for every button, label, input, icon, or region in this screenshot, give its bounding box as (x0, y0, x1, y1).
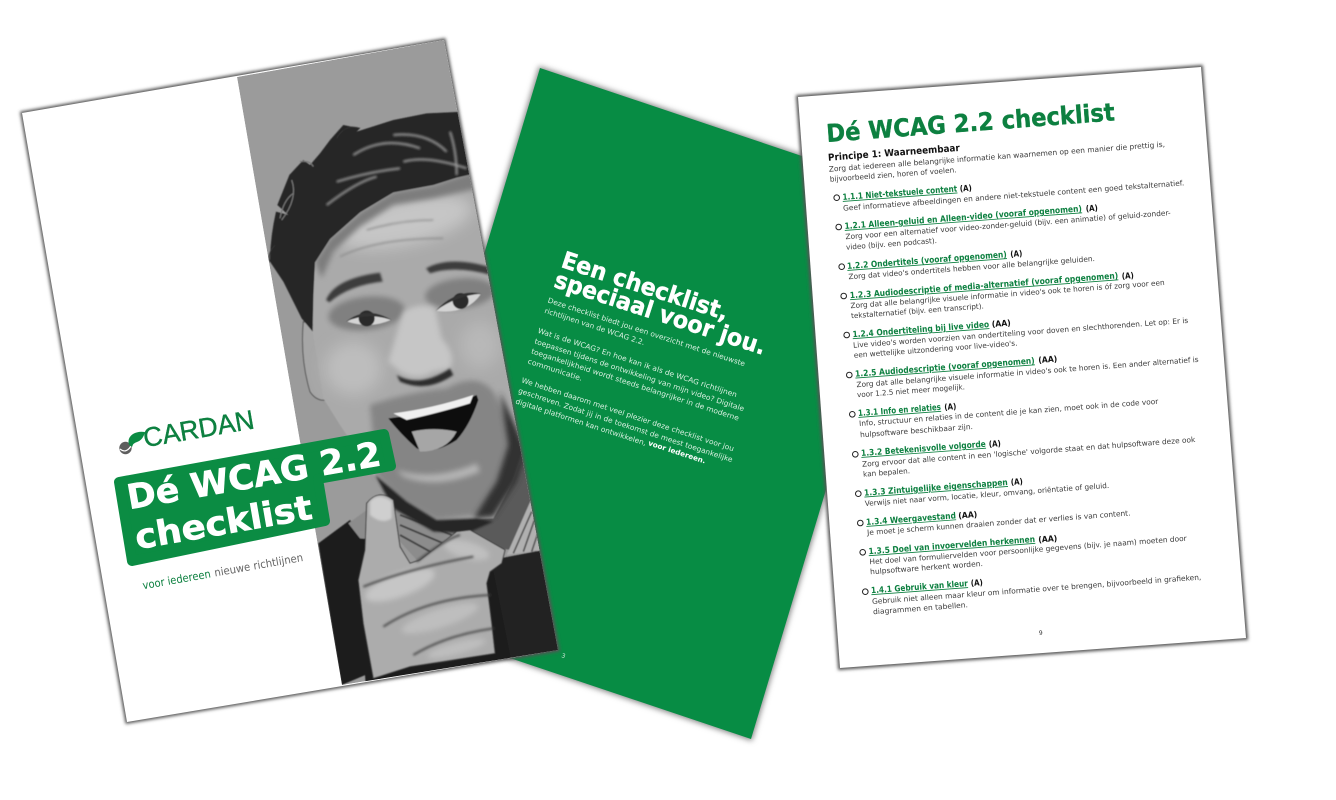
panel: cover page (22, 40, 563, 722)
checklist item 1.2.5: (AA) (1038, 354, 1058, 365)
checklist item 1.1.1: 1.1.1 Niet-tekstuele content (842, 184, 958, 203)
heading: Een checklist, speciaal voor jou: Een checklist, (558, 246, 732, 326)
open mouth (388, 395, 478, 450)
logo: Cardan: CARDAN (141, 405, 256, 453)
checklist item 1.2.3: 1.2.3 Audiodescriptie of media-alternatief (vooraf opgenomen) (849, 271, 1119, 301)
checklist item 1.3.1: hulpsoftware beschikbaar zijn. (860, 422, 973, 439)
heading: Een checklist, speciaal voor jou: speciaal voor jou. (551, 266, 770, 361)
shirt collar (348, 508, 457, 560)
subtitle: voor iedereen nieuwe richtlijnen (142, 551, 304, 592)
text block: intro paragraphs: toepassen tijdens de ontwikkeling van mijn video? Digitale (533, 337, 746, 413)
checklist item 1.2.3: (A) (1121, 270, 1134, 281)
checklist item 1.2.2: (A) (1010, 248, 1023, 259)
subtitle: voor iedereen nieuwe richtlijnen: nieuwe richtlijnen (213, 551, 304, 579)
panel: checklist page (798, 67, 1246, 668)
checklist item 1.2.3: Zorg dat alle belangrijke visuele informatie in video's ook te horen is óf zorg voor een (850, 278, 1165, 310)
title label: Dé WCAG 2.2 checklist: checklist (132, 488, 315, 558)
page number 3: 3 (560, 652, 566, 660)
forehead wrinkles (340, 220, 443, 257)
text block: intro paragraphs: We hebben daarom met veel plezier deze checklist voor jou (520, 376, 735, 453)
eye sockets (327, 293, 407, 334)
neck (433, 445, 540, 552)
text block: Principe 1: Zorg dat iedereen alle belangrijke informatie kan waarnemen op een manier die prettig is, (828, 140, 1165, 174)
text block: intro paragraphs (514, 296, 747, 465)
text block: intro paragraphs: toegankelijkheid wordt steeds belangrijker in de moderne (530, 347, 741, 423)
checklist item 1.2.5: voor 1.2.5 niet meer mogelijk. (857, 382, 965, 399)
panel: green intro page (376, 68, 915, 739)
checklist item 1.2.2: 1.2.2 Ondertitels (vooraf opgenomen) (847, 250, 1007, 272)
hair shadow on forehead (315, 172, 477, 278)
text block: intro paragraphs: voor iedereen. (647, 438, 707, 465)
icon: logo mark (119, 432, 145, 454)
checklist item 1.2.4: Live video's worden voorzien van ondertiteling voor doven en slechthorenden. Let op: Er is (853, 316, 1189, 350)
checklist item 1.3.1: 1.3.1 Info en relaties (858, 403, 941, 419)
text block: Principe 1: Principe 1: Waarneembaar (828, 143, 960, 164)
pointing hand (358, 495, 505, 678)
checklist item 1.3.3: (A) (1010, 476, 1023, 487)
checklist item 1.3.2: (A) (988, 438, 1001, 449)
photo: laughing man pointing (237, 40, 563, 698)
ear (302, 322, 327, 400)
text block: intro paragraphs: Wat is de WCAG? En hoe kan ik als de WCAG richtlijnen (537, 326, 738, 399)
checklist item 1.2.1: 1.2.1 Alleen-geluid en Alleen-video (vooraf opgenomen) (844, 204, 1082, 232)
checklist item 1.3.2: Zorg ervoor dat alle content in een 'logische' volgorde staat en dat hulpsoftware deze ook (862, 435, 1196, 469)
checklist item 1.4.1: (A) (970, 577, 983, 588)
checklist item 1.3.4: Je moet je scherm kunnen draaien zonder dat er verlies is van content. (866, 508, 1131, 537)
subtitle: voor iedereen nieuwe richtlijnen: voor iedereen (142, 567, 212, 592)
checklist item 1.2.5: Zorg dat alle belangrijke visuele informatie in video's ook te horen is. Een ander alternatief is (856, 355, 1199, 389)
nose (388, 306, 452, 377)
checklist item 1.3.4: 1.3.4 Weergavestand (866, 511, 956, 528)
checklist item 1.3.5: hulpsoftware herkent worden. (870, 559, 983, 576)
sweater (318, 520, 366, 685)
checklist item 1.3.2: 1.3.2 Betekenisvolle volgorde (861, 440, 986, 459)
stubble and chin beard (370, 381, 523, 520)
checklist item 1.3.3: 1.3.3 Zintuigelijke eigenschappen (864, 478, 1008, 499)
checklist item 1.4.1: diagrammen en tabellen. (873, 600, 968, 616)
checklist item 1.2.1 (836, 203, 1171, 252)
hair (270, 112, 475, 332)
checklist item 1.3.5: 1.3.5 Doel van invoervelden herkennen (868, 535, 1035, 557)
eyes (347, 314, 391, 325)
checklist item 1.1.1: (A) (959, 183, 972, 193)
checklist item 1.2.1: (A) (1085, 203, 1098, 213)
checklist item 1.2.1: video (bijv. een podcast). (846, 236, 937, 252)
checklist item 1.1.1: Geef informatieve afbeeldingen en andere niet-tekstuele content een goed tekstalternatief. (843, 178, 1185, 213)
title label: Dé WCAG 2.2 checklist (119, 434, 391, 561)
checklist item 1.2.5: 1.2.5 Audiodescriptie (vooraf opgenomen) (855, 356, 1035, 380)
checklist item 1.2.3: tekstalternatief (bijv. een transcript). (851, 301, 984, 320)
checklist item 1.3.1: (A) (944, 401, 957, 412)
heading: Dé WCAG 2.2 checklist: Dé WCAG 2.2 checklist (825, 97, 1116, 148)
checklist item 1.2.4: (AA) (991, 318, 1011, 329)
text block: intro paragraphs: Deze checklist biedt jou een overzicht met de nieuwste (547, 296, 747, 368)
checklist item 1.2.4: 1.2.4 Ondertiteling bij live video (852, 320, 990, 340)
face (313, 172, 525, 522)
page number 9: 9 (1039, 630, 1043, 637)
eyebrows (326, 273, 383, 302)
title label: Dé WCAG 2.2 checklist: Dé WCAG 2.2 (124, 435, 384, 518)
checklist item 1.3.2: kan bepalen. (863, 466, 910, 479)
checklist item 1.2.2: Zorg dat video's ondertitels hebben voor alle belangrijke geluiden. (848, 254, 1095, 281)
checklist item 1.3.5: Het doel van formuliervelden voor persoonlijke gegevens (bijv. je naam) moeten door (869, 534, 1188, 566)
checklist item 1.3.1: Info, structuur en relaties in de content die je kan zien, moet ook in de code voor (859, 397, 1160, 428)
text block: Principe 1: bijvoorbeeld zien, horen of voelen. (829, 165, 957, 184)
checklist item 1.4.1: Gebruik niet alleen maar kleur om informatie over te brengen, bijvoorbeeld in grafieken, (872, 573, 1202, 606)
checklist item 1.3.4: (AA) (958, 509, 978, 520)
checklist item 1.3.5: (AA) (1038, 533, 1058, 544)
checklist item 1.3.3: Verwijs niet naar vorm, locatie, kleur, omvang, oriëntatie of geluid. (864, 481, 1109, 508)
text block: intro paragraphs: communicatie. (527, 357, 584, 383)
text block: intro paragraphs: richtlijnen van de WCAG 2.2. (543, 306, 646, 347)
checklist item 1.4.1: 1.4.1 Gebruik van kleur (871, 579, 969, 596)
text block: intro paragraphs: geschreven. Zodat jij in de toekomst de meest toegankelijke (517, 386, 734, 464)
checklist item 1.2.3 (841, 270, 1165, 320)
text block: intro paragraphs: digitale platformen kan ontwikkelen, (514, 397, 647, 448)
checklist item 1.2.4: een wettelijke uitzondering voor live-video's. (853, 339, 1018, 360)
checklist item 1.2.1: Zorg voor een alternatief voor video-zonder-geluid (bijv. een animatie) of geluid-zonder- (845, 208, 1171, 241)
